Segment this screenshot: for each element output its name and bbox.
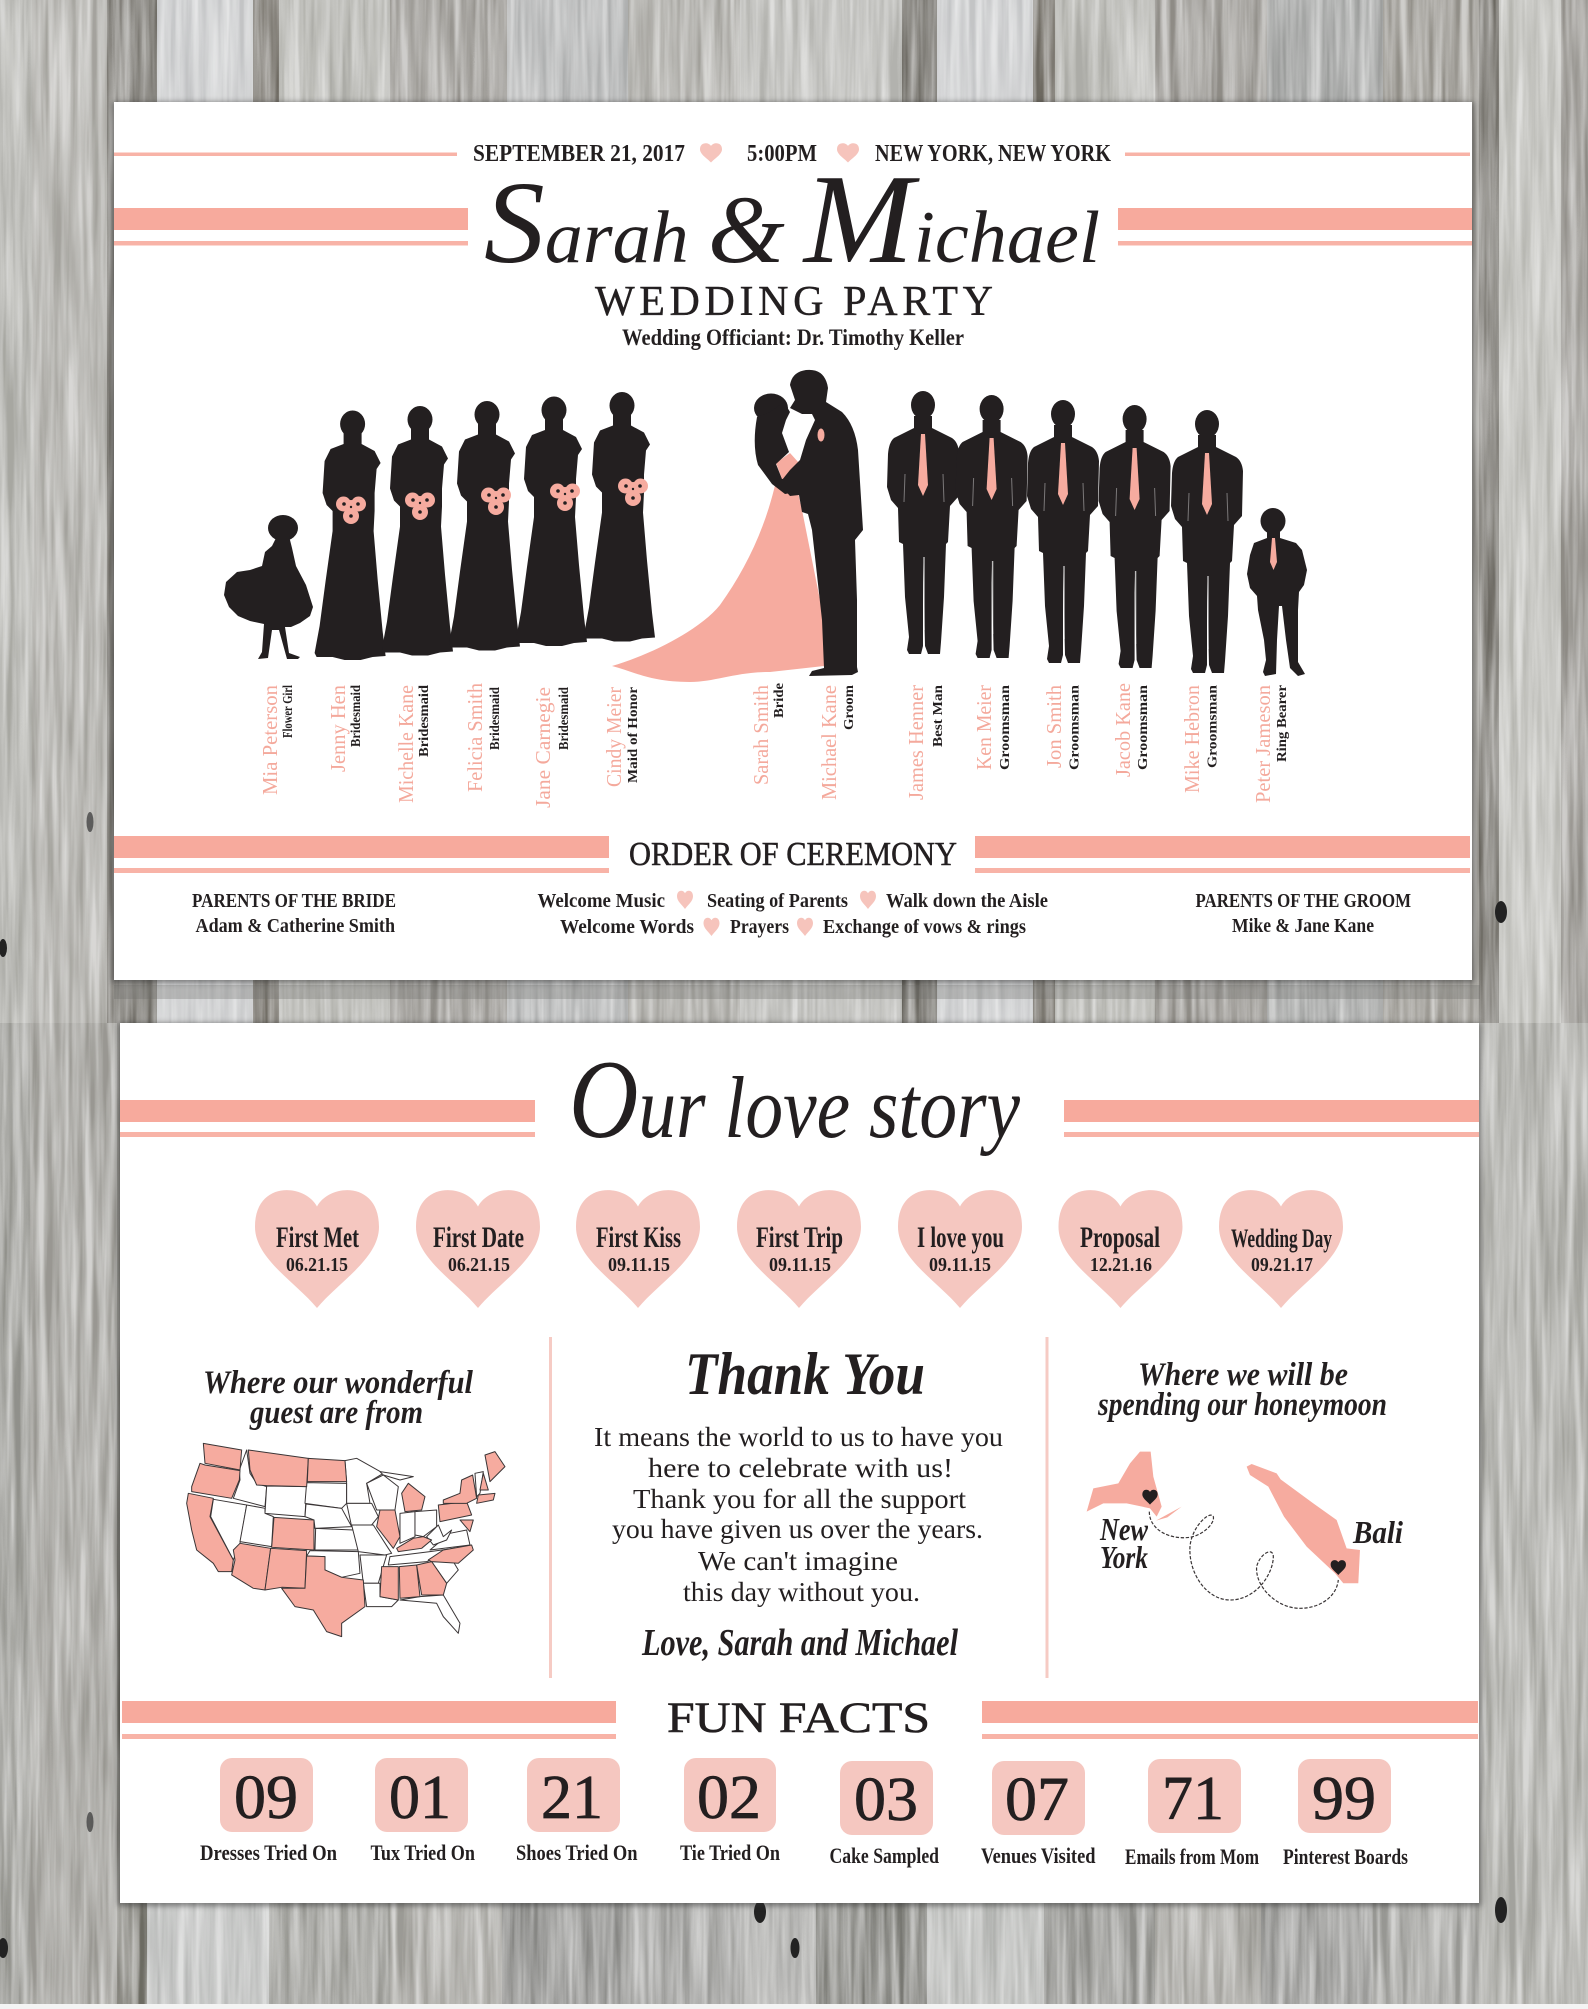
fact: pinterest <box>1283 1759 1408 1869</box>
silhouette: bridesmaid Michelle <box>382 406 453 656</box>
silhouette: bridesmaid Jane <box>516 396 587 646</box>
fact: emails: 71 <box>1162 1765 1224 1833</box>
fact: venues: Venues Visited <box>981 1843 1096 1868</box>
panel: wedding party card <box>112 102 1474 983</box>
love story stripes <box>120 1100 1479 1137</box>
title: couple names: Sarah & Michael <box>484 148 1100 290</box>
fact: emails <box>1125 1759 1259 1869</box>
thank you message: here to celebrate with us! <box>648 1453 953 1483</box>
wedding party names: groom side: Mike Hebron <box>1180 685 1204 793</box>
wedding party names: groom side <box>817 683 1290 803</box>
wedding party names: bride side: Bride <box>772 683 787 718</box>
wedding party names: groom side: Jacob Kane <box>1111 683 1135 777</box>
silhouette: groomsman Jon <box>1027 400 1099 663</box>
heading: guests map: guest are from <box>249 1395 423 1431</box>
timeline heart: first kiss: First Kiss <box>596 1221 681 1254</box>
fact: cake <box>830 1761 939 1868</box>
wedding party names: groom side: Ken Meier <box>972 685 996 770</box>
wedding party names: bride side: Bridesmaid <box>557 687 572 750</box>
timeline heart: first date <box>416 1190 540 1308</box>
wedding party names: bride side: Michelle Kane <box>394 685 418 803</box>
fact: shoes: Shoes Tried On <box>516 1840 638 1865</box>
wedding party names: bride side: Mia Peterson <box>258 685 282 795</box>
fact: venues: 07 <box>1005 1766 1069 1834</box>
label: bali: Bali <box>1352 1514 1403 1550</box>
divider right <box>1046 1337 1048 1678</box>
timeline heart: first trip <box>737 1190 861 1308</box>
heading: fun facts: FUN FACTS <box>667 1695 930 1742</box>
thank you message: It means the world to us to have you <box>594 1422 1004 1452</box>
silhouette: groomsman Jacob <box>1099 405 1171 668</box>
heading: wedding party: WEDDING PARTY <box>595 279 993 325</box>
label: york: York <box>1100 1539 1148 1575</box>
parents of the groom: Mike & Jane Kane <box>1232 915 1374 937</box>
order of ceremony list: Welcome Words <box>560 916 694 938</box>
order of ceremony list: Walk down the Aisle <box>886 890 1048 912</box>
silhouette: maid of honor Cindy <box>584 392 655 642</box>
timeline heart: proposal <box>1058 1190 1182 1308</box>
heading: honeymoon: spending our honeymoon <box>1097 1387 1387 1423</box>
fun facts stripes <box>122 1701 1478 1739</box>
wedding party names: groom side: Jon Smith <box>1042 685 1066 768</box>
thank you message: Love, Sarah and Michael <box>641 1622 958 1664</box>
divider left <box>549 1337 552 1678</box>
order of ceremony list: Seating of Parents <box>707 890 848 912</box>
thank you message: Thank You <box>685 1341 925 1407</box>
wedding party names: bride side: Bridesmaid <box>349 685 364 747</box>
fact: shoes <box>516 1758 638 1865</box>
wedding party names: bride side: Jane Carnegie <box>531 687 555 808</box>
wedding party names: bride side: Bridesmaid <box>488 687 503 750</box>
silhouette: groom <box>782 370 863 676</box>
silhouette: groomsman Mike <box>1171 410 1243 673</box>
wedding party names: groom side: James Henner <box>904 685 928 800</box>
fact: dresses: Dresses Tried On <box>200 1840 337 1865</box>
heading: honeymoon: Where we will be <box>1138 1357 1348 1393</box>
thank you message: this day without you. <box>683 1577 920 1607</box>
heading: order of ceremony: ORDER OF CEREMONY <box>629 836 957 873</box>
date time location line: SEPTEMBER 21, 2017 <box>473 141 685 167</box>
officiant: Wedding Officiant: Dr. Timothy Keller <box>622 325 964 351</box>
wedding party names: bride side: Cindy Meier <box>602 687 626 787</box>
timeline heart: wedding day: 09.21.17 <box>1251 1254 1313 1276</box>
thank you message: you have given us over the years. <box>612 1514 983 1544</box>
timeline heart: i love you: 09.11.15 <box>929 1254 991 1276</box>
order of ceremony list: Exchange of vows & rings <box>823 916 1026 938</box>
wedding party names: groom side: Groomsman <box>1206 685 1220 768</box>
timeline heart: first date: 06.21.15 <box>448 1254 510 1276</box>
timeline heart: first date: First Date <box>433 1221 524 1254</box>
map: new york state <box>1087 1452 1182 1521</box>
thank you message: Thank you for all the support <box>633 1484 967 1514</box>
fact: dresses <box>200 1758 337 1865</box>
parents of the bride: PARENTS OF THE BRIDE <box>192 890 396 912</box>
wedding party names: groom side: Peter Jameson <box>1251 685 1275 803</box>
parents of the bride: Adam & Catherine Smith <box>196 915 395 937</box>
wedding party names: groom side: Best Man <box>931 685 946 747</box>
timeline heart: first met: First Met <box>276 1221 359 1254</box>
ceremony stripes <box>114 836 1470 873</box>
wedding party names: groom side: Ring Bearer <box>1275 685 1290 762</box>
map: bali island <box>1247 1464 1360 1583</box>
timeline heart: proposal: Proposal <box>1080 1221 1160 1254</box>
wedding party names: bride side <box>258 683 787 808</box>
fact: dresses: 09 <box>234 1764 298 1832</box>
silhouette: bridesmaid Felicia <box>449 401 520 650</box>
silhouette: flower girl <box>224 515 313 659</box>
fact: tie <box>680 1758 780 1865</box>
order of ceremony list: Welcome Music <box>538 890 665 912</box>
fact: pinterest: Pinterest Boards <box>1283 1844 1408 1869</box>
icon: heart bali <box>1331 1560 1346 1575</box>
silhouette: best man James <box>887 391 959 654</box>
timeline heart: first kiss: 09.11.15 <box>608 1254 670 1276</box>
silhouette: ring bearer <box>1247 508 1307 676</box>
fact: tie: Tie Tried On <box>680 1840 780 1865</box>
icon: heart new york <box>1142 1490 1158 1505</box>
parents of the groom: PARENTS OF THE GROOM <box>1196 890 1411 912</box>
timeline heart: i love you <box>898 1190 1022 1308</box>
timeline heart: first kiss <box>576 1190 700 1308</box>
thank you message <box>594 1341 1004 1664</box>
wedding party names: bride side: Jenny Hen <box>326 685 350 772</box>
timeline heart: first met: 06.21.15 <box>286 1254 348 1276</box>
panel: love story card <box>118 1023 1481 1906</box>
thank you message: We can't imagine <box>698 1546 898 1576</box>
date time location line: 5:00PM <box>747 141 817 167</box>
fact: cake: Cake Sampled <box>830 1843 939 1868</box>
timeline heart: wedding day: Wedding Day <box>1231 1224 1332 1253</box>
timeline heart: first trip: 09.11.15 <box>769 1254 831 1276</box>
order of ceremony list <box>538 890 1048 938</box>
fact: pinterest: 99 <box>1312 1765 1376 1833</box>
timeline heart: wedding day <box>1219 1190 1343 1308</box>
fact: tux: Tux Tried On <box>370 1840 475 1865</box>
timeline heart: first met <box>255 1190 379 1308</box>
fact: cake: 03 <box>854 1766 918 1834</box>
heading: guests map <box>203 1365 474 1431</box>
fact: tux: 01 <box>389 1764 451 1832</box>
map: united states guest origins <box>187 1443 505 1637</box>
label: new york: New <box>1099 1511 1149 1547</box>
timeline heart: proposal: 12.21.16 <box>1090 1254 1152 1276</box>
heading: guests map: Where our wonderful <box>203 1365 474 1401</box>
timeline heart: first trip: First Trip <box>756 1221 843 1254</box>
timeline heart: i love you: I love you <box>917 1221 1004 1254</box>
silhouette: bridesmaid Jenny <box>315 410 386 660</box>
wedding party names: bride side: Maid of Honor <box>626 687 641 783</box>
heading: our love story: Our love story <box>569 1038 1021 1162</box>
silhouette: groomsman Ken <box>956 395 1028 658</box>
silhouette: bride in pink gown <box>612 394 824 682</box>
header stripes <box>114 152 1472 246</box>
parents of the bride <box>192 890 396 937</box>
fact: emails: Emails from Mom <box>1125 1844 1259 1869</box>
fact: tie: 02 <box>697 1764 761 1832</box>
wedding party names: bride side: Felicia Smith <box>463 683 487 792</box>
wedding party names: groom side: Groomsman <box>1136 685 1151 770</box>
wedding party names: groom side: Groom <box>842 685 857 730</box>
date time location line <box>473 141 1111 167</box>
wedding party names: bride side: Flower Girl <box>281 685 296 738</box>
wedding party names: bride side: Sarah Smith <box>749 685 773 785</box>
fact: shoes: 21 <box>541 1764 603 1832</box>
date time location line: NEW YORK, NEW YORK <box>875 141 1111 167</box>
fact: venues <box>981 1761 1096 1868</box>
wedding party names: groom side: Groomsman <box>998 685 1013 770</box>
wedding party names: groom side: Michael Kane <box>817 685 841 800</box>
honeymoon route map <box>1087 1452 1403 1608</box>
parents of the groom <box>1196 890 1411 937</box>
order of ceremony list: Prayers <box>730 916 789 938</box>
wedding party names: bride side: Bridesmaid <box>417 685 432 757</box>
route: dashed flight path <box>1149 1512 1338 1608</box>
wedding party names: groom side: Groomsman <box>1068 685 1082 770</box>
fact: tux <box>370 1758 475 1865</box>
heading: honeymoon <box>1097 1357 1387 1423</box>
